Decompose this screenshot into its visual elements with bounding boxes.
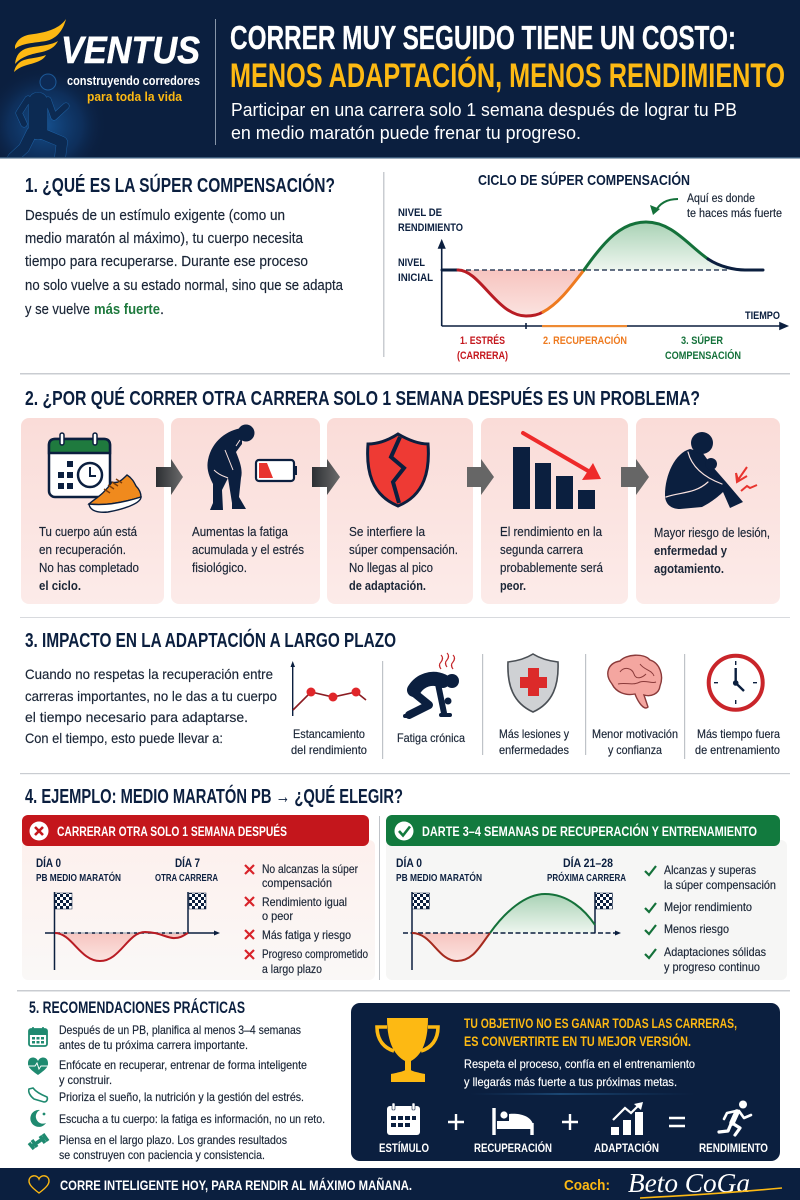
tip 1: calendar bbox=[29, 1024, 301, 1052]
card 5 text: agotamiento. bbox=[654, 562, 724, 576]
y-axis labels: INICIAL bbox=[398, 272, 433, 284]
arrow 3 bbox=[467, 459, 494, 495]
header banner bbox=[0, 0, 800, 158]
impact: stagnation bbox=[290, 661, 367, 757]
impact: chronic fatigue: Fatiga crónica bbox=[397, 732, 466, 745]
card 1 text: Tu cuerpo aún está bbox=[39, 525, 137, 539]
callout: where you get stronger: te haces más fuerte bbox=[687, 208, 782, 220]
day labels: OTRA CARRERA bbox=[155, 873, 218, 884]
panel: take 3-4 weeks bbox=[386, 815, 787, 980]
consequences list: Rendimiento igual bbox=[262, 896, 347, 909]
card 4 text: peor. bbox=[500, 579, 526, 593]
card 2 text bbox=[192, 525, 304, 575]
phase labels: (CARRERA) bbox=[457, 350, 508, 362]
icon: falling bars and red arrow bbox=[513, 433, 601, 509]
card 3 text: súper compensación. bbox=[349, 543, 458, 557]
impact: stagnation: Estancamiento bbox=[293, 728, 365, 741]
tip 3: shoe: Prioriza el sueño, la nutrición y la gestión del estrés. bbox=[59, 1091, 304, 1104]
logo wordmark: VENTUS bbox=[61, 30, 200, 72]
consequences list: o peor bbox=[262, 910, 293, 923]
y-axis labels bbox=[398, 207, 463, 284]
arrow 2 bbox=[312, 459, 340, 495]
coach credit bbox=[564, 1168, 782, 1198]
mini chart: one week bbox=[45, 892, 220, 970]
consequences list: compensación bbox=[262, 877, 332, 890]
callout: where you get stronger bbox=[650, 193, 782, 220]
day labels: PRÓXIMA CARRERA bbox=[547, 871, 626, 884]
goal text: Respeta el proceso, confía en el entrenamiento bbox=[464, 1058, 695, 1071]
benefits list: Adaptaciones sólidas bbox=[664, 946, 766, 959]
card 2 text: acumulada y el estrés bbox=[192, 543, 304, 557]
heading 4: 4. EJEMPLO: MEDIO MARATÓN PB → ¿QUÉ ELEGIR? bbox=[25, 784, 403, 808]
formula: stimulus bbox=[379, 1103, 429, 1155]
title bbox=[230, 19, 785, 95]
chart title: CICLO DE SÚPER COMPENSACIÓN bbox=[478, 171, 690, 189]
icon: cracked shield bbox=[368, 434, 428, 506]
formula: performance runner bbox=[699, 1100, 768, 1155]
y-axis labels: RENDIMIENTO bbox=[398, 222, 463, 234]
plus sign bbox=[562, 1114, 578, 1130]
consequences list: a largo plazo bbox=[262, 963, 322, 976]
body text 1: . bbox=[160, 302, 164, 318]
phase labels: 2. RECUPERACIÓN bbox=[543, 334, 627, 347]
goal text: y llegarás más fuerte a tus próximas metas. bbox=[464, 1076, 677, 1089]
formula: recovery: RECUPERACIÓN bbox=[474, 1142, 552, 1155]
subtitle bbox=[231, 100, 737, 143]
footer bar bbox=[0, 1168, 800, 1200]
y-axis labels: NIVEL bbox=[398, 257, 425, 269]
card 3 text: Se interfiere la bbox=[349, 525, 425, 539]
impact: chronic fatigue bbox=[397, 653, 466, 745]
benefits list: la súper compensación bbox=[664, 879, 776, 892]
green option header bbox=[386, 815, 780, 846]
axes bbox=[439, 241, 787, 329]
card 2: accumulated fatigue bbox=[171, 418, 320, 604]
logo tagline: construyendo corredores bbox=[67, 73, 200, 88]
phase labels bbox=[457, 334, 741, 362]
section 3: long-term adaptation impact bbox=[25, 628, 781, 759]
arrow 1 bbox=[156, 459, 183, 495]
card 4 text: El rendimiento en la bbox=[500, 525, 602, 539]
day labels: DÍA 21–28 bbox=[563, 855, 613, 870]
logo tagline bbox=[67, 73, 200, 104]
impact: injuries and illness: enfermedades bbox=[499, 744, 569, 757]
benefits list: Menos riesgo bbox=[664, 923, 729, 936]
consequences list: No alcanzas la súper bbox=[262, 863, 358, 876]
day labels: PB MEDIO MARATÓN bbox=[36, 871, 121, 884]
card 4 text: segunda carrera bbox=[500, 543, 583, 557]
tip 1: calendar: Después de un PB, planifica al menos 3–4 semanas bbox=[59, 1024, 301, 1037]
body text 1: tiempo para recuperarse. Durante ese proceso bbox=[25, 254, 308, 270]
body text 3: carreras importantes, no le das a tu cuerpo bbox=[25, 688, 277, 704]
icon: bent-over tired runner and low battery bbox=[207, 424, 297, 510]
tip 5: dumbbell bbox=[29, 1134, 287, 1162]
callout: where you get stronger: Aquí es donde bbox=[687, 193, 755, 205]
body text 1: Después de un estímulo exigente (como un bbox=[25, 208, 285, 224]
day labels bbox=[36, 855, 218, 884]
mini chart: recovery bbox=[403, 892, 621, 970]
coach credit: Beto CoGa bbox=[628, 1168, 750, 1198]
icon: seated injured person bbox=[665, 432, 757, 509]
card 5 text: enfermedad y bbox=[654, 544, 727, 558]
tip 2: heart: y construir. bbox=[59, 1074, 112, 1087]
panel: race again after one week bbox=[22, 815, 375, 980]
y-axis labels: NIVEL DE bbox=[398, 207, 442, 219]
card 2 text: Aumentas la fatiga bbox=[192, 525, 288, 539]
card 4 text bbox=[500, 525, 603, 593]
heading 1: 1. ¿QUÉ ES LA SÚPER COMPENSACIÓN? bbox=[25, 173, 335, 197]
card 4 text: probablemente será bbox=[500, 561, 603, 575]
card 5 text: Mayor riesgo de lesión, bbox=[654, 526, 770, 540]
card 3: interferes with supercompensation bbox=[327, 418, 473, 604]
tip 4: moon: Escucha a tu cuerpo: la fatiga es información, no un reto. bbox=[59, 1113, 325, 1126]
icon: runner silhouette bbox=[13, 74, 66, 158]
phase labels: 1. ESTRÉS bbox=[460, 334, 505, 347]
formula: adaptation bbox=[594, 1102, 659, 1155]
plus sign bbox=[448, 1114, 464, 1130]
performance curve bbox=[442, 222, 763, 316]
consequences list: Más fatiga y riesgo bbox=[262, 929, 351, 942]
day labels: DÍA 0 bbox=[396, 855, 422, 870]
subtitle: Participar en una carrera solo 1 semana después de lograr tu PB bbox=[231, 100, 737, 120]
card 3 text: de adaptación. bbox=[349, 579, 426, 593]
arrow 4 bbox=[621, 459, 649, 495]
tip 2: heart bbox=[28, 1057, 307, 1087]
card 1 text bbox=[39, 525, 139, 593]
impact: lower motivation: Menor motivación bbox=[592, 728, 678, 741]
impact: time out of training: Más tiempo fuera bbox=[697, 728, 781, 741]
red option header bbox=[22, 815, 369, 846]
heading 3: 3. IMPACTO EN LA ADAPTACIÓN A LARGO PLAZO bbox=[25, 628, 396, 652]
chart: supercompensation cycle bbox=[398, 171, 787, 362]
consequences list bbox=[245, 863, 368, 976]
body text 3: el tiempo necesario para adaptarse. bbox=[25, 709, 248, 725]
card 1: still recovering bbox=[21, 418, 164, 604]
equals sign bbox=[669, 1118, 685, 1126]
tip 1: calendar: antes de tu próxima carrera importante. bbox=[59, 1039, 248, 1052]
formula: adaptation: ADAPTACIÓN bbox=[594, 1142, 659, 1155]
benefits list: Alcanzas y superas bbox=[664, 864, 756, 877]
impact: time out of training bbox=[695, 656, 781, 757]
section 4: example bbox=[22, 784, 787, 980]
icon: heart outline bbox=[29, 1176, 49, 1193]
section 2: why racing one week later is a problem bbox=[21, 387, 780, 604]
formula: stimulus: ESTÍMULO bbox=[379, 1142, 429, 1155]
card 1 text: el ciclo. bbox=[39, 579, 81, 593]
tip 4: moon bbox=[30, 1110, 325, 1127]
heading 5: 5. RECOMENDACIONES PRÁCTICAS bbox=[29, 998, 245, 1017]
tip 2: heart: Enfócate en recuperar, entrenar de forma inteligente bbox=[59, 1059, 307, 1072]
body text 1: no solo vuelve a su estado normal, sino que se adapta bbox=[25, 278, 344, 294]
body text 3: Con el tiempo, esto puede llevar a: bbox=[25, 730, 223, 746]
card 4: worse performance bbox=[481, 418, 628, 604]
day labels: DÍA 7 bbox=[175, 855, 200, 870]
section 1: what is supercompensation bbox=[25, 173, 344, 318]
body text 1: medio maratón al máximo), tu cuerpo necesita bbox=[25, 231, 304, 247]
x-axis label: TIEMPO bbox=[745, 310, 780, 322]
panel: goal callout bbox=[351, 1003, 780, 1161]
red option header: CARRERAR OTRA SOLO 1 SEMANA DESPUÉS bbox=[57, 824, 287, 839]
goal headline: ES CONVERTIRTE EN TU MEJOR VERSIÓN. bbox=[464, 1034, 691, 1049]
card 1 text: en recuperación. bbox=[39, 543, 126, 557]
goal headline bbox=[464, 1016, 737, 1049]
icon: trophy bbox=[377, 1018, 438, 1082]
body text 1: más fuerte bbox=[94, 302, 160, 318]
tip 5: dumbbell: Piensa en el largo plazo. Los grandes resultados bbox=[59, 1134, 287, 1147]
formula: performance runner: RENDIMIENTO bbox=[699, 1143, 768, 1155]
coach credit: Coach: bbox=[564, 1178, 610, 1194]
day labels bbox=[396, 855, 626, 884]
body text 1: y se vuelve bbox=[25, 302, 90, 318]
card 2 text: fisiológico. bbox=[192, 561, 247, 575]
benefits list bbox=[645, 864, 776, 974]
body text 3 bbox=[25, 666, 277, 746]
tip 3: shoe bbox=[29, 1088, 304, 1104]
consequences list: Progreso comprometido bbox=[262, 948, 368, 961]
body text 1 bbox=[25, 208, 344, 318]
card 5 text bbox=[654, 526, 770, 576]
phase labels: 3. SÚPER bbox=[681, 334, 723, 347]
logo tagline: para toda la vida bbox=[87, 89, 183, 104]
footer slogan: CORRE INTELIGENTE HOY, PARA RENDIR AL MÁXIMO MAÑANA. bbox=[60, 1176, 412, 1193]
formula: recovery bbox=[474, 1108, 552, 1155]
goal text bbox=[464, 1058, 695, 1089]
section 5: practical recommendations bbox=[28, 998, 325, 1162]
icon: calendar and shoe bbox=[49, 433, 141, 512]
card 3 text bbox=[349, 525, 458, 593]
impact: lower motivation bbox=[592, 655, 678, 757]
body text 3: Cuando no respetas la recuperación entre bbox=[25, 666, 273, 682]
impact: injuries and illness bbox=[499, 654, 569, 757]
benefits list: y progreso continuo bbox=[664, 961, 760, 974]
impact: lower motivation: y confianza bbox=[608, 744, 663, 757]
benefits list: Mejor rendimiento bbox=[664, 901, 752, 914]
card 1 text: No has completado bbox=[39, 561, 139, 575]
day labels: PB MEDIO MARATÓN bbox=[396, 871, 482, 884]
day labels: DÍA 0 bbox=[36, 855, 61, 870]
card 5: injury risk bbox=[636, 418, 780, 604]
subtitle: en medio maratón puede frenar tu progreso. bbox=[231, 123, 581, 143]
phase labels: COMPENSACIÓN bbox=[665, 349, 741, 362]
impact: time out of training: de entrenamiento bbox=[695, 744, 780, 757]
logo: Ventus wing bbox=[14, 19, 66, 72]
impact: injuries and illness: Más lesiones y bbox=[499, 728, 569, 741]
impact: stagnation: del rendimiento bbox=[291, 744, 367, 757]
card 3 text: No llegas al pico bbox=[349, 561, 433, 575]
tip 5: dumbbell: se construyen con paciencia y consistencia. bbox=[59, 1149, 265, 1162]
